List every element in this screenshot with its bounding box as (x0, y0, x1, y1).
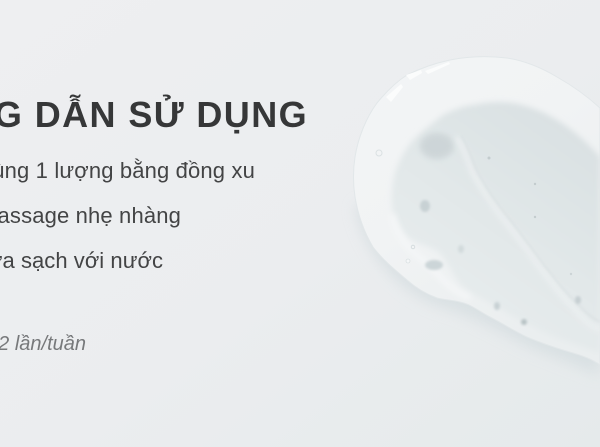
gel bubbles (376, 150, 581, 325)
instruction list (0, 158, 255, 273)
gel outer body (354, 57, 600, 365)
gel inner pool (392, 102, 600, 353)
gel swatch (354, 57, 600, 376)
gel cast shadow (355, 200, 600, 376)
gel highlights (386, 62, 450, 102)
gel soft shadow pocket (420, 133, 454, 159)
gel inner ridge (457, 137, 600, 330)
gel lower white fold (392, 215, 470, 298)
